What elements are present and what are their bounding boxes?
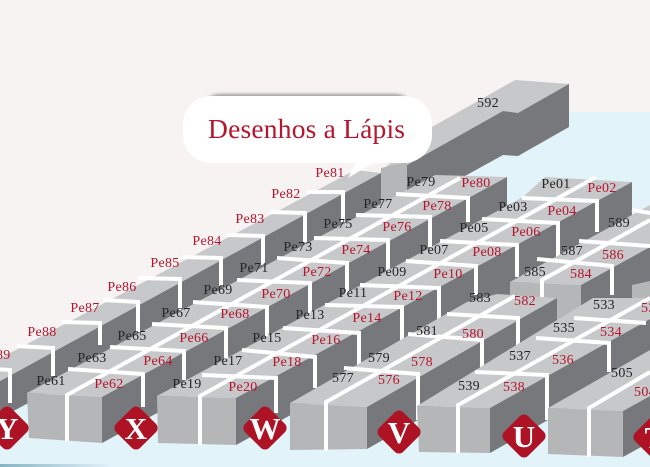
shelf labels: Pe69 [203, 283, 233, 298]
shelf labels: Pe13 [295, 308, 325, 323]
shelf labels: 580 [462, 327, 484, 342]
shelf row V [290, 294, 557, 451]
marker X [112, 404, 160, 452]
shelf row with 584 to 589 [510, 205, 650, 330]
shelf labels: 586 [602, 248, 624, 263]
shelf row U [417, 298, 650, 453]
shelf labels: Pe67 [161, 306, 191, 321]
shelf labels: Pe75 [323, 217, 353, 232]
shelf labels: Pe88 [27, 325, 57, 340]
shelf labels: 582 [514, 294, 536, 309]
shelf labels [0, 96, 650, 400]
shelf labels: Pe63 [77, 351, 107, 366]
shelf labels: Pe84 [192, 234, 222, 249]
shelf row T [548, 350, 650, 457]
shelf labels: Pe04 [547, 204, 577, 219]
shelf labels: Pe78 [422, 199, 452, 214]
shelf labels: 537 [509, 349, 531, 364]
shelf labels: 505 [611, 366, 633, 381]
shelf labels: Pe06 [511, 225, 541, 240]
shelf labels: Pe08 [472, 245, 502, 260]
marker T [631, 413, 650, 461]
shelf labels: Pe86 [107, 280, 137, 295]
shelf labels: Pe71 [239, 261, 269, 276]
shelf labels: 585 [524, 265, 546, 280]
shelf labels: Pe12 [393, 289, 423, 304]
shelf labels: Pe61 [36, 374, 66, 389]
shelf labels: Pe65 [117, 329, 147, 344]
marker V [375, 408, 423, 456]
shelf labels: Pe72 [302, 265, 332, 280]
marker W: W [250, 411, 280, 446]
shelf labels: Pe83 [235, 212, 265, 227]
shelf labels: Pe64 [143, 354, 173, 369]
speech balloon title: Desenhos a Lápis [208, 113, 405, 144]
shelf labels: 536 [552, 353, 574, 368]
shelf labels: Pe15 [252, 331, 282, 346]
marker W [241, 404, 289, 452]
shelf labels: 578 [411, 355, 433, 370]
shelf labels: Pe87 [70, 301, 100, 316]
shelf labels: Pe85 [150, 256, 180, 271]
shelf labels: 577 [332, 371, 354, 386]
shelf labels: Pe01 [541, 177, 571, 192]
diamond markers [0, 404, 650, 461]
shelf labels: Pe81 [315, 166, 345, 181]
shelf labels: Pe14 [352, 311, 382, 326]
shelf labels: Pe82 [271, 187, 301, 202]
shelf labels: Pe62 [94, 377, 124, 392]
shelf labels: Pe19 [172, 377, 202, 392]
shelf labels: 534 [600, 325, 622, 340]
shelf labels: Pe03 [498, 200, 528, 215]
shelf labels: Pe73 [283, 240, 313, 255]
marker Y [0, 404, 31, 452]
shelf labels: 579 [368, 351, 390, 366]
shelf labels: 576 [378, 373, 400, 388]
shelf labels: Pe68 [220, 307, 250, 322]
shelf labels: 584 [570, 267, 592, 282]
shelf labels: Pe76 [382, 220, 412, 235]
shelf labels: 535 [553, 321, 575, 336]
shelf labels: 589 [608, 216, 630, 231]
shelf labels: Pe74 [341, 243, 371, 258]
shelf labels: 587 [561, 244, 583, 259]
speech balloon title [183, 94, 432, 178]
shelf labels: Pe17 [213, 354, 243, 369]
shelf labels: Pe66 [179, 331, 209, 346]
marker U: U [513, 419, 535, 454]
shelf labels: 533 [593, 298, 615, 313]
shelf labels: Pe79 [406, 175, 436, 190]
marker V: V [388, 415, 411, 450]
shelf labels: Pe09 [377, 265, 407, 280]
shelf labels: Pe70 [261, 287, 291, 302]
shelf row W [157, 177, 632, 445]
shelf labels: Pe20 [228, 380, 258, 395]
shelf labels: Pe18 [272, 355, 302, 370]
shelf labels: Pe80 [461, 176, 491, 191]
marker X: X [125, 411, 148, 446]
shelf labels: Pe11 [339, 286, 367, 301]
shelf labels: 581 [416, 324, 438, 339]
shelf labels: 583 [469, 291, 491, 306]
shelf labels: Pe10 [433, 267, 463, 282]
shelf labels: Pe77 [363, 197, 393, 212]
shelf row Y [0, 170, 381, 429]
shelf block 592 [380, 80, 569, 208]
marker U [500, 412, 548, 460]
shelf labels: 592 [477, 96, 499, 111]
shelf row X [27, 175, 507, 443]
shelf labels: Pe16 [311, 333, 341, 348]
shelf labels: 538 [503, 380, 525, 395]
shelf labels: Pe05 [459, 221, 489, 236]
shelf labels: 539 [458, 379, 480, 394]
shelf labels: Pe02 [587, 181, 617, 196]
shelf labels: Pe07 [419, 243, 449, 258]
